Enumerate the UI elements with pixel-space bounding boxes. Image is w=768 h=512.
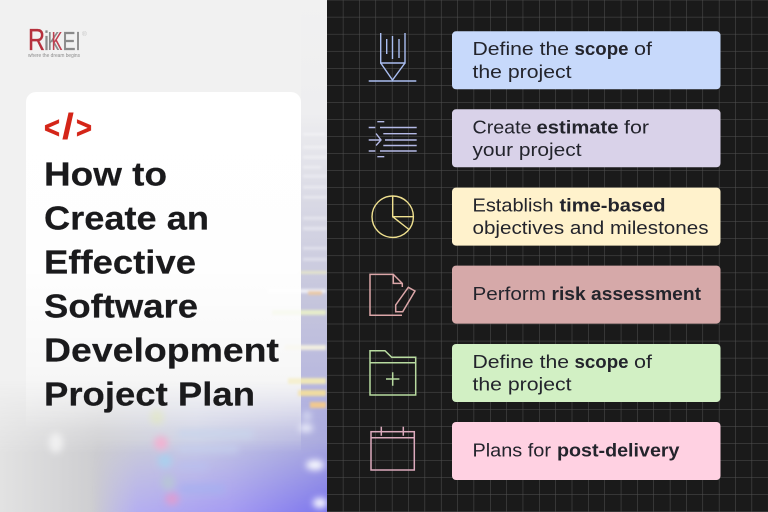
icon: pencil — [369, 33, 416, 81]
panel: step 2: your project — [472, 139, 582, 160]
logo: where the dream begins — [28, 53, 80, 59]
panel: step 4: Perform — [472, 283, 546, 304]
icon: document with pencil — [370, 274, 415, 315]
panel: step 5 — [452, 344, 720, 402]
logo: E — [62, 26, 76, 56]
panel: step 3: time-based — [560, 194, 666, 216]
panel: step 2: for — [624, 116, 649, 138]
icon: code brackets — [44, 106, 92, 147]
panel: step 6 — [452, 422, 720, 480]
panel: step 1: the project — [472, 61, 572, 82]
panel: step 2 — [452, 109, 720, 167]
title: How to — [44, 156, 167, 192]
panel: white title card — [26, 92, 301, 430]
icon: indent list — [369, 122, 417, 157]
icon: calendar — [371, 427, 414, 470]
panel: step 4 — [452, 266, 720, 324]
panel: step 5: of — [634, 351, 653, 372]
panel: blurred code background — [0, 0, 327, 512]
panel: step 5: Define the — [472, 351, 569, 372]
panel: step 2: Create — [472, 116, 532, 138]
icon: pie chart — [372, 196, 413, 237]
panel: step 1: of — [634, 38, 653, 59]
panel: step 2: estimate — [536, 116, 618, 138]
logo: i — [44, 26, 49, 56]
logo: K — [48, 26, 60, 56]
logo: ® — [82, 30, 87, 38]
logo: K — [52, 26, 63, 56]
title: Software — [44, 288, 198, 324]
icon: code brackets: < — [44, 110, 60, 145]
logo: R — [28, 22, 45, 57]
logo — [28, 22, 87, 59]
title: Development — [44, 332, 279, 368]
panel: step 3 — [452, 188, 720, 246]
panel: step 3: Establish — [472, 194, 554, 216]
panel: step 6: Plans for — [472, 440, 551, 460]
panel: step 1 — [452, 31, 720, 89]
logo: I — [76, 26, 80, 56]
title: Effective — [44, 244, 196, 280]
panel: step 3: objectives and milestones — [472, 217, 708, 238]
icon: code brackets: > — [76, 110, 92, 145]
panel: step 4: risk assessment — [552, 283, 701, 304]
title: Create an — [44, 200, 209, 236]
panel: step 1: Define the — [472, 38, 569, 59]
panel: step 5: the project — [472, 374, 572, 394]
title — [44, 156, 279, 412]
title: Project Plan — [44, 376, 255, 412]
icon: code brackets: / — [62, 106, 74, 147]
panel: dark grid background — [327, 0, 768, 512]
icon: folder with plus — [370, 351, 416, 395]
panel: step 5: scope — [574, 351, 628, 372]
panel: step 1: scope — [574, 38, 628, 59]
panel: step 6: post-delivery — [557, 440, 680, 460]
